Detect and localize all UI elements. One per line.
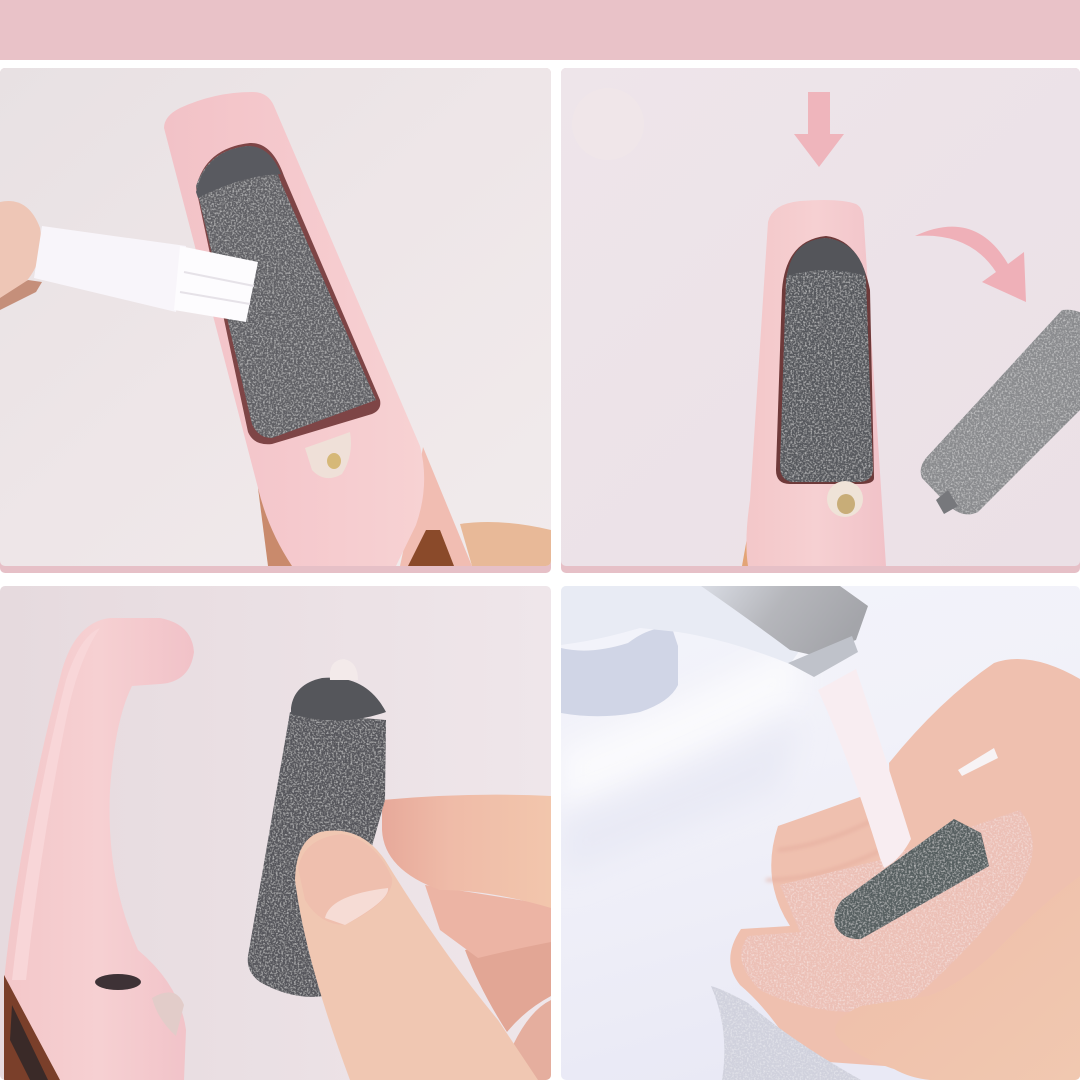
top banner xyxy=(0,0,1080,60)
water stream xyxy=(818,669,911,868)
roller pin xyxy=(936,490,958,514)
brush xyxy=(34,226,186,312)
device hook xyxy=(4,618,194,1080)
device body xyxy=(746,200,886,566)
arrow: down xyxy=(794,92,844,167)
rose gold base xyxy=(742,541,748,566)
removed roller xyxy=(248,712,386,997)
faint circle xyxy=(572,88,644,160)
faucet top xyxy=(701,586,868,655)
finger crease xyxy=(766,810,900,880)
roller pin xyxy=(330,659,358,680)
hand finger lower right xyxy=(460,522,551,566)
middle finger xyxy=(425,885,551,958)
foreground thumb xyxy=(835,876,1080,1080)
panel: rinsing under faucet xyxy=(561,586,1080,1080)
lower right finger xyxy=(513,1000,551,1080)
device hole xyxy=(95,974,141,990)
palm foam xyxy=(741,810,1033,1012)
roller xyxy=(196,146,376,438)
sink shadow xyxy=(561,720,800,880)
device highlight xyxy=(12,655,76,980)
roller cap xyxy=(196,146,281,198)
roller cap xyxy=(787,238,866,276)
faucet spout xyxy=(561,586,800,664)
roller cap xyxy=(291,678,386,721)
faucet aerator xyxy=(788,636,858,677)
roller xyxy=(780,238,873,482)
arrow: curved xyxy=(915,227,1026,302)
led lamp xyxy=(827,481,863,517)
thumb xyxy=(295,831,538,1080)
sink highlight xyxy=(561,640,800,810)
device body xyxy=(164,92,424,566)
led lamp xyxy=(152,992,184,1036)
loose roller xyxy=(921,310,1080,514)
finger tip xyxy=(0,201,41,306)
gap between fingers xyxy=(958,748,998,776)
rose gold base xyxy=(4,975,60,1080)
rose gold handle xyxy=(400,447,472,566)
wet roller xyxy=(834,819,989,939)
led lamp xyxy=(305,432,351,478)
panel: removed roller in fingers xyxy=(0,586,551,1080)
index finger xyxy=(382,795,551,908)
panel: replacing roller xyxy=(561,68,1080,573)
roller cavity xyxy=(196,143,380,444)
roller cavity xyxy=(776,236,874,484)
thumbnail xyxy=(298,834,392,925)
thumbnail tip xyxy=(325,888,388,925)
faucet base xyxy=(561,628,678,716)
panel: cleaning with brush xyxy=(0,68,551,573)
third finger xyxy=(465,936,551,1032)
splash water xyxy=(711,986,861,1080)
rear hand xyxy=(730,659,1080,1080)
